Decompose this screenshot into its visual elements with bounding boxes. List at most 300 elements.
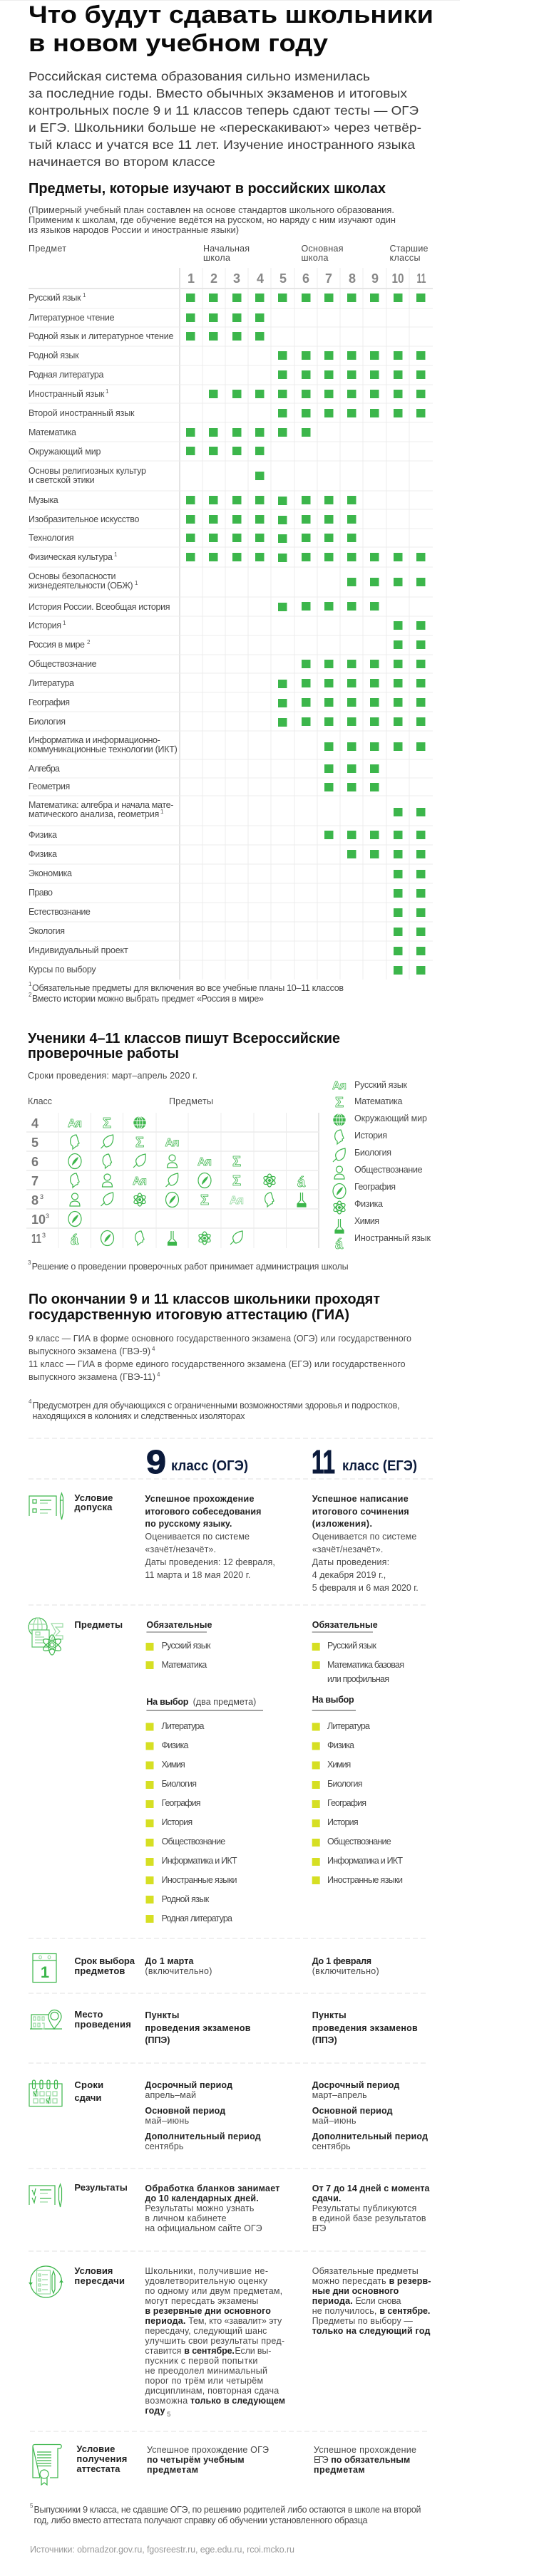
GIA description bbox=[29, 1334, 411, 1382]
row title bbox=[74, 1492, 113, 1512]
row: Математика: алгебра и начала bbox=[29, 800, 425, 819]
row: grade 8 bbox=[31, 1193, 306, 1208]
panel: предметы bbox=[29, 1618, 404, 1923]
row: Родной язык и литературное чтение: Родной язык и литературное чтение bbox=[29, 331, 173, 341]
intro paragraph: Российская система образования сильно изменилась bbox=[29, 69, 370, 83]
row: Информатика и ИКТ: Информатика и информационно- bbox=[29, 735, 160, 745]
11 class place: проведения экзаменов bbox=[312, 2023, 418, 2033]
legend item: Математика: Σ bbox=[335, 1095, 344, 1111]
11 class text: (изложения). bbox=[312, 1519, 372, 1529]
11 class retake text: Если снова bbox=[355, 2296, 401, 2306]
note about curriculum: из языков народов России и иностранные языки) bbox=[29, 225, 239, 235]
table header: 10 bbox=[392, 271, 404, 286]
panel: VPR table bbox=[26, 1096, 319, 1248]
9 class text: Даты проведения: 12 февраля, bbox=[145, 1557, 275, 1567]
11 class results: Результаты публикуются bbox=[312, 2203, 416, 2213]
9 class retake text: году bbox=[145, 2406, 165, 2416]
row: grade 7: 7 bbox=[31, 1174, 39, 1188]
9 class optional: Родная литература bbox=[161, 1913, 232, 1923]
row title: Результаты bbox=[74, 2182, 128, 2193]
row: Изобразительное искусство bbox=[29, 514, 356, 524]
footnote 3: 3 bbox=[28, 1260, 31, 1266]
table header: 8 bbox=[349, 271, 356, 286]
9 class retake text: в резервные дни основного bbox=[145, 2306, 271, 2316]
11 class certificate bbox=[314, 2445, 416, 2475]
row: Математика: алгебра и начала: 1 bbox=[160, 809, 164, 815]
11 class retake text: можно пересдать bbox=[312, 2276, 386, 2286]
11 class text: Даты проведения: bbox=[312, 1557, 389, 1567]
row title bbox=[74, 2009, 131, 2030]
panel: subjects table bbox=[29, 244, 433, 980]
9 class retake text bbox=[145, 2266, 285, 2418]
row: Математика bbox=[29, 427, 311, 437]
heading: VPR bbox=[28, 1031, 340, 1061]
11 class certificate: ЕГЭ bbox=[314, 2455, 329, 2465]
GIA description: выпускного экзамена (ГВЭ-9) bbox=[29, 1346, 150, 1356]
11 class text: Оценивается по системе bbox=[312, 1532, 416, 1542]
9 class results: Обработка бланков занимает bbox=[145, 2183, 279, 2193]
row: Второй иностранный язык: Второй иностранный язык bbox=[29, 408, 135, 418]
9 class text: «зачёт/незачёт». bbox=[145, 1544, 216, 1554]
11 class text bbox=[312, 1494, 419, 1593]
table header: Начальная bbox=[203, 244, 250, 254]
legend item: Физика: Физика bbox=[354, 1199, 383, 1209]
row: Физика (8–11) bbox=[29, 849, 425, 859]
row: Родная литература: Родная литература bbox=[29, 370, 103, 380]
row: grade 7: á bbox=[297, 1175, 306, 1190]
row: Право bbox=[29, 888, 425, 898]
panel: условия пересдачи bbox=[29, 2265, 431, 2418]
9 class periods: Основной период bbox=[145, 2106, 225, 2116]
9 class periods: сентябрь bbox=[145, 2141, 183, 2151]
row: Индивидуальный проект: Индивидуальный проект bbox=[29, 945, 128, 955]
9 class retake text: ставится bbox=[145, 2346, 181, 2356]
11 class place: (ППЭ) bbox=[312, 2035, 337, 2045]
11 class retake text: Обязательные предметы bbox=[312, 2266, 419, 2276]
row: grade 10: 3 bbox=[46, 1212, 49, 1220]
11 class results bbox=[312, 2183, 431, 2233]
row: Физическая культура: 1 bbox=[114, 551, 118, 558]
9 class results: на официальном сайте ОГЭ bbox=[145, 2223, 262, 2233]
11 class place bbox=[312, 2010, 418, 2045]
icon: subjects collage bbox=[29, 1618, 63, 1655]
row: История: 1 bbox=[63, 620, 66, 626]
row: grade 5: 5 bbox=[31, 1136, 39, 1150]
legend item: Математика bbox=[335, 1095, 403, 1111]
legend item: Иностранный язык bbox=[335, 1233, 431, 1252]
footnote 5: Выпускники 9 класса, не сдавшие ОГЭ, по решению родителей либо остаются в школе на второй bbox=[34, 2505, 421, 2515]
row: grade 5 bbox=[31, 1135, 180, 1151]
intro paragraph: тый класс и учатся все 11 лет. Изучение иностранного языка bbox=[29, 137, 415, 152]
11 class retake text: ные дни основного bbox=[312, 2286, 399, 2296]
row: Естествознание bbox=[29, 907, 425, 917]
row: grade 11 bbox=[31, 1231, 242, 1248]
9 class place: Пункты bbox=[145, 2010, 179, 2020]
column head: 9 класс: 9 bbox=[146, 1443, 166, 1480]
9 class periods: май–июнь bbox=[145, 2116, 189, 2126]
table column titles bbox=[28, 1096, 213, 1106]
11 class text: 5 февраля и 6 мая 2020 г. bbox=[312, 1583, 419, 1593]
row: ОБЖ: 1 bbox=[135, 580, 138, 586]
11 class optional: География bbox=[327, 1798, 366, 1808]
row: Россия в мире bbox=[29, 639, 425, 650]
9 class optional: Родной язык bbox=[161, 1894, 210, 1904]
row: grade 6: Ая bbox=[197, 1156, 212, 1168]
9 class required: Русский язык bbox=[161, 1641, 211, 1651]
table header: 9 bbox=[371, 271, 379, 286]
9 class retake text: Школьники, получившие не- bbox=[145, 2266, 268, 2276]
row: Математика: Математика bbox=[29, 427, 76, 437]
footnotes 1 and 2: 2 bbox=[29, 992, 32, 998]
11 class certificate: предметам bbox=[314, 2465, 365, 2475]
intro paragraph: и ЕГЭ. Школьники больше не «перескакивают» через четвёр- bbox=[29, 120, 421, 135]
row title: Срок выбора bbox=[74, 1956, 135, 1966]
row title: Предметы bbox=[74, 1619, 123, 1630]
table column titles: Предметы bbox=[169, 1096, 213, 1106]
row: Русский язык: Русский язык bbox=[29, 293, 81, 303]
9 class optional: На выбор bbox=[146, 1697, 189, 1707]
11 class deadline: (включительно) bbox=[312, 1966, 379, 1976]
legend item: Обществознание bbox=[334, 1165, 423, 1179]
column head: 11 класс: класс (ЕГЭ) bbox=[342, 1458, 417, 1474]
11 class required bbox=[312, 1620, 404, 1684]
9 class certificate: предметам bbox=[147, 2465, 198, 2475]
9 class optional: Биология bbox=[161, 1779, 197, 1789]
column head: 9 класс: класс (ОГЭ) bbox=[171, 1458, 248, 1474]
9 class retake text: удовлетворительную оценку bbox=[145, 2276, 268, 2286]
9 class retake text: по одному или двум предметам, bbox=[145, 2286, 282, 2296]
row: Физическая культура bbox=[29, 551, 425, 562]
row: grade 8: Ая bbox=[230, 1195, 244, 1207]
9 class optional bbox=[145, 1697, 263, 1923]
row: Окружающий мир bbox=[29, 447, 264, 457]
row: Геометрия: Геометрия bbox=[29, 781, 70, 791]
row: Родной язык bbox=[29, 350, 425, 360]
legend item: Физика bbox=[332, 1199, 383, 1214]
legend item: Окружающий мир: Окружающий мир bbox=[354, 1113, 427, 1123]
row title: сдачи bbox=[74, 2092, 101, 2103]
9 class optional: Химия bbox=[161, 1760, 185, 1770]
column head: 9 класс bbox=[146, 1443, 248, 1480]
11 class certificate: Успешное прохождение bbox=[314, 2445, 416, 2455]
row: grade 4: 4 bbox=[31, 1116, 39, 1131]
panel: условие получения аттестата bbox=[33, 2443, 416, 2485]
icon: ring calendar bbox=[29, 2080, 62, 2106]
9 class place: проведения экзаменов bbox=[145, 2023, 251, 2033]
legend item: История: История bbox=[354, 1131, 387, 1141]
11 class optional bbox=[312, 1695, 403, 1885]
9 class retake text: порог по трём или четырём bbox=[145, 2376, 263, 2386]
row: grade 6: 6 bbox=[31, 1155, 39, 1169]
9 class required bbox=[145, 1620, 212, 1670]
9 class retake text: пересдачу, следующий шанс bbox=[145, 2326, 267, 2336]
11 class periods: март–апрель bbox=[312, 2090, 367, 2100]
row title: Условие bbox=[74, 1492, 113, 1503]
row: Право: Право bbox=[29, 888, 53, 898]
11 class results: ЕГЭ bbox=[312, 2223, 326, 2233]
11 class periods: Досрочный период bbox=[312, 2080, 399, 2090]
row: Россия в мире: Россия в мире bbox=[29, 640, 85, 650]
row: grade 5: Σ bbox=[135, 1135, 144, 1151]
row: Технология: Технология bbox=[29, 533, 74, 543]
table header: 6 bbox=[302, 271, 309, 286]
table header: классы bbox=[389, 253, 421, 263]
GIA description: 11 класс — ГИА в форме единого государственного экзамена (ЕГЭ) или государственного bbox=[29, 1359, 406, 1369]
intro paragraph bbox=[29, 69, 421, 169]
legend item: Биология: Биология bbox=[354, 1148, 391, 1158]
icon: calendar one bbox=[33, 1953, 56, 1982]
row: География bbox=[29, 697, 425, 707]
11 class optional: Химия bbox=[327, 1760, 351, 1770]
9 class required: Математика bbox=[161, 1660, 207, 1670]
11 class required: Математика базовая bbox=[327, 1660, 404, 1670]
row: Литература bbox=[29, 678, 425, 688]
row title bbox=[74, 2265, 125, 2286]
title: в новом учебном году bbox=[29, 30, 328, 57]
row: ОБЖ bbox=[29, 571, 425, 591]
9 class text bbox=[145, 1494, 275, 1580]
intro paragraph: за последние годы. Вместо обычных экзаменов и итоговых bbox=[29, 86, 407, 100]
11 class optional: Обществознание bbox=[327, 1837, 391, 1847]
row: Родная литература bbox=[29, 370, 425, 380]
row: grade 10 bbox=[31, 1211, 81, 1227]
footnotes 1 and 2: 1 bbox=[29, 981, 32, 987]
row title: Место bbox=[74, 2009, 103, 2020]
9 class retake text: периода. bbox=[145, 2316, 185, 2326]
9 class optional: Литература bbox=[161, 1721, 205, 1731]
legend item: Обществознание: Обществознание bbox=[354, 1165, 423, 1175]
column head: 11 класс bbox=[312, 1443, 417, 1480]
sources: Источники: obrnadzor.gov.ru, fgosreestr.ru, ege.edu.ru, rcoi.mcko.ru bbox=[30, 2545, 294, 2555]
column head: 11 класс: 11 bbox=[312, 1443, 335, 1480]
9 class periods bbox=[145, 2080, 261, 2151]
9 class retake text: Если вы- bbox=[235, 2346, 271, 2356]
panel: сроки сдачи bbox=[29, 2079, 428, 2151]
11 class retake text bbox=[312, 2266, 431, 2336]
row: Литературное чтение bbox=[29, 313, 264, 323]
row: Геометрия bbox=[29, 781, 379, 791]
9 class results: Результаты можно узнать bbox=[145, 2203, 254, 2213]
intro paragraph: начинается во втором классе bbox=[29, 155, 215, 169]
table header: школа bbox=[301, 253, 329, 263]
icon: calendar one: 1 bbox=[41, 1963, 49, 1981]
row title: допуска bbox=[74, 1502, 113, 1512]
heading: VPR: Ученики 4–11 классов пишут Всероссийские bbox=[28, 1031, 340, 1046]
11 class text: «зачёт/незачёт». bbox=[312, 1544, 383, 1554]
footnote 4: 4 bbox=[29, 1398, 32, 1405]
11 class retake text: периода. bbox=[312, 2296, 353, 2306]
row title: проведения bbox=[74, 2019, 131, 2030]
11 class required: Обязательные bbox=[312, 1620, 378, 1630]
9 class retake text: 5 bbox=[167, 2411, 170, 2418]
11 class text: итогового сочинения bbox=[312, 1507, 409, 1517]
heading: VPR: проверочные работы bbox=[28, 1046, 179, 1061]
title bbox=[29, 1, 433, 57]
11 class certificate: по обязательным bbox=[331, 2455, 410, 2465]
11 class periods: Дополнительный период bbox=[312, 2131, 428, 2141]
row: Изобразительное искусство: Изобразительное искусство bbox=[29, 514, 139, 524]
11 class retake text: не получилось, bbox=[312, 2306, 376, 2316]
row: Иностранный язык bbox=[29, 388, 425, 399]
GIA description: 4 bbox=[157, 1371, 160, 1378]
row: Естествознание: Естествознание bbox=[29, 907, 91, 917]
row: grade 4: Ая bbox=[68, 1118, 82, 1130]
9 class retake text: улучшить свои результаты пред- bbox=[145, 2336, 284, 2346]
9 class retake text: Тем, кто «завалит» эту bbox=[188, 2316, 282, 2326]
9 class deadline bbox=[145, 1956, 212, 1976]
row: Окружающий мир: Окружающий мир bbox=[29, 447, 101, 457]
row title: пересдачи bbox=[74, 2275, 125, 2286]
footnote 5 bbox=[30, 2503, 421, 2525]
row: Русский язык: 1 bbox=[83, 292, 86, 298]
row: История России. Всеобщая история bbox=[29, 602, 379, 612]
row: Информатика и ИКТ bbox=[29, 735, 425, 754]
row: Экология: Экология bbox=[29, 926, 65, 936]
note about curriculum bbox=[29, 205, 396, 235]
11 class place: Пункты bbox=[312, 2010, 347, 2020]
row: Музыка bbox=[29, 495, 356, 505]
legend item: Химия: Химия bbox=[354, 1216, 379, 1226]
legend item: Химия bbox=[335, 1216, 379, 1233]
9 class place: (ППЭ) bbox=[145, 2035, 170, 2045]
legend item: История bbox=[335, 1130, 387, 1144]
11 class periods: сентябрь bbox=[312, 2141, 351, 2151]
panel: срок выбора предметов bbox=[33, 1953, 379, 1982]
row: grade 4 bbox=[31, 1116, 146, 1131]
legend item: Иностранный язык: Иностранный язык bbox=[354, 1233, 431, 1243]
11 class optional: На выбор bbox=[312, 1695, 354, 1705]
11 class deadline bbox=[312, 1956, 379, 1976]
table header: Основная bbox=[301, 244, 344, 254]
row: Физика: Физика bbox=[29, 830, 57, 840]
row title bbox=[76, 2443, 127, 2474]
table header: 7 bbox=[325, 271, 332, 286]
table header: 5 bbox=[279, 271, 287, 286]
legend item: География: География bbox=[354, 1182, 396, 1192]
11 class results: От 7 до 14 дней с момента bbox=[312, 2183, 431, 2193]
9 class optional: Обществознание bbox=[161, 1837, 225, 1847]
table header: 11 bbox=[416, 271, 426, 286]
table header bbox=[29, 244, 428, 286]
11 class optional: История bbox=[327, 1817, 359, 1827]
row: Физика bbox=[29, 830, 425, 840]
row: Основы религиозных культур и светской этики: Основы религиозных культур bbox=[29, 466, 146, 476]
row: grade 6 bbox=[31, 1154, 241, 1170]
11 class optional: Биология bbox=[327, 1779, 362, 1789]
icon: certificate bbox=[33, 2445, 61, 2485]
11 class retake text: в сентябре. bbox=[379, 2306, 430, 2316]
row: Литература: Литература bbox=[29, 678, 74, 688]
row: grade 8: Σ bbox=[200, 1193, 209, 1208]
9 class place bbox=[145, 2010, 251, 2045]
row: Русский язык bbox=[29, 292, 425, 303]
row: Математика: алгебра и начала: матического анализа, геометрия bbox=[29, 809, 159, 819]
row title: предметов bbox=[74, 1965, 125, 1976]
row: Физическая культура: Физическая культура bbox=[29, 552, 113, 562]
row: История России. Всеобщая история: История России. Всеобщая история bbox=[29, 602, 170, 612]
row: ОБЖ: Основы безопасности bbox=[29, 571, 116, 581]
11 class deadline: До 1 февраля bbox=[312, 1956, 371, 1966]
legend item: География bbox=[333, 1182, 396, 1198]
11 class text: 4 декабря 2019 г., bbox=[312, 1570, 386, 1580]
row: Биология bbox=[29, 717, 425, 727]
panel: условие допуска bbox=[29, 1492, 419, 1593]
footnote 3: Решение о проведении проверочных работ принимает администрация школы bbox=[32, 1262, 349, 1272]
heading: GIA bbox=[29, 1292, 380, 1323]
9 class retake text: только в следующем bbox=[190, 2396, 285, 2406]
row title bbox=[74, 2079, 103, 2103]
9 class optional: (два предмета) bbox=[193, 1697, 256, 1707]
row: Родной язык: Родной язык bbox=[29, 350, 79, 360]
footnotes 1 and 2 bbox=[29, 981, 344, 1004]
9 class text: 11 марта и 18 мая 2020 г. bbox=[145, 1570, 250, 1580]
9 class retake text: дисциплинам, повторная сдача bbox=[145, 2386, 279, 2396]
legend item: Окружающий мир bbox=[333, 1113, 427, 1126]
GIA description: 9 класс — ГИА в форме основного государственного экзамена (ОГЭ) или государственного bbox=[29, 1334, 411, 1344]
row: Родной язык и литературное чтение bbox=[29, 331, 264, 341]
footnote 4 bbox=[29, 1398, 399, 1421]
row: Литературное чтение: Литературное чтение bbox=[29, 313, 115, 323]
table header: 3 bbox=[233, 271, 240, 286]
9 class retake text: пускник с первой попытки bbox=[145, 2356, 257, 2366]
row: Математика: алгебра и начала: Математика: алгебра и начала мате- bbox=[29, 800, 173, 810]
footnote 4: Предусмотрен для обучающихся с ограниченными возможностями здоровья и подростков, bbox=[33, 1401, 399, 1411]
row: Алгебра bbox=[29, 764, 379, 774]
row: Информатика и ИКТ: коммуникационные технологии (ИКТ) bbox=[29, 744, 178, 754]
panel: результаты bbox=[29, 2182, 431, 2233]
row: Алгебра: Алгебра bbox=[29, 764, 60, 774]
row: grade 7: Σ bbox=[232, 1173, 241, 1189]
footnotes 1 and 2: Вместо истории можно выбрать предмет «Россия в мире» bbox=[32, 994, 264, 1004]
legend item: Иностранный язык: á bbox=[335, 1237, 344, 1252]
row: ОБЖ: жизнедеятельности (ОБЖ) bbox=[29, 581, 133, 591]
11 class optional: Иностранные языки bbox=[327, 1875, 403, 1885]
9 class deadline: (включительно) bbox=[145, 1966, 212, 1976]
row: География: География bbox=[29, 697, 70, 707]
row title: аттестата bbox=[76, 2463, 120, 2474]
row: grade 11: 3 bbox=[42, 1232, 46, 1239]
table column titles: Класс bbox=[28, 1096, 52, 1106]
11 class optional: Информатика и ИКТ bbox=[327, 1856, 403, 1866]
title: Что будут сдавать школьники bbox=[29, 1, 433, 28]
9 class optional: Иностранные языки bbox=[161, 1875, 237, 1885]
11 class results: в единой базе результатов bbox=[312, 2213, 426, 2223]
9 class text: итогового собеседования bbox=[145, 1507, 261, 1517]
row: Иностранный язык: 1 bbox=[106, 388, 109, 395]
9 class certificate bbox=[147, 2445, 269, 2475]
9 class required: Обязательные bbox=[146, 1620, 212, 1630]
9 class retake text: в сентябре. bbox=[184, 2346, 235, 2356]
note about curriculum: Применим к школам, где обучение ведётся на русском, но наряду с ним изучают один bbox=[29, 215, 396, 225]
row: Курсы по выбору bbox=[29, 965, 425, 975]
row: grade 8: 8 bbox=[31, 1193, 39, 1208]
row title: Условия bbox=[74, 2265, 113, 2276]
9 class deadline: До 1 марта bbox=[145, 1956, 194, 1966]
footnote 5: год, либо вместо аттестата получают справку об обучении установленного образца bbox=[34, 2515, 368, 2525]
11 class retake text: Предметы по выбору — bbox=[312, 2316, 413, 2326]
row: Обществознание bbox=[29, 659, 425, 669]
legend item: Русский язык: Ая bbox=[332, 1080, 347, 1092]
table header: Предмет bbox=[29, 244, 66, 254]
row: grade 4: Σ bbox=[103, 1116, 111, 1131]
footnote 4: находящихся в колониях и следственных изоляторах bbox=[33, 1411, 245, 1421]
row: Экономика bbox=[29, 868, 425, 878]
row: Экономика: Экономика bbox=[29, 868, 72, 878]
9 class optional: Информатика и ИКТ bbox=[161, 1856, 237, 1866]
icon: circular arrows with form bbox=[29, 2266, 63, 2297]
11 class retake text: только на следующий год bbox=[312, 2326, 430, 2336]
11 class results: сдачи. bbox=[312, 2193, 341, 2203]
